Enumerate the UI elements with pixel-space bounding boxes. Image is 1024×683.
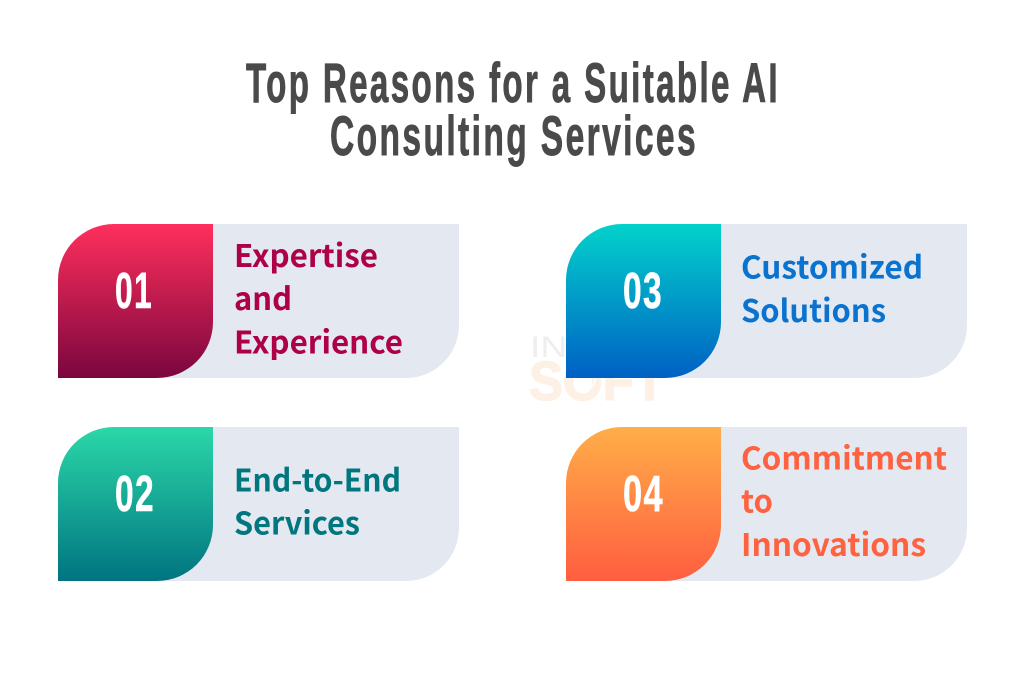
label 04: Innovations	[741, 520, 926, 565]
number 03: 03	[623, 262, 663, 319]
label 04: to	[741, 476, 773, 522]
panel: 02 End-to-End Services	[58, 427, 459, 581]
label 04: Commitment	[741, 434, 947, 478]
number tab 02	[58, 427, 213, 581]
label 01: Expertise	[234, 231, 378, 276]
watermark logo: SOFT	[529, 350, 665, 412]
number 02: 02	[115, 465, 155, 522]
label 03	[741, 242, 923, 331]
panel background 03	[628, 224, 967, 378]
panel: 01 Expertise and Experience	[58, 224, 459, 378]
number 04: 04	[623, 465, 664, 522]
title	[246, 51, 780, 167]
label 03: Solutions	[741, 286, 886, 331]
watermark logo: INT	[530, 331, 590, 364]
panel background 01	[120, 224, 459, 378]
title: Consulting Services	[330, 104, 698, 167]
panel: 03 Customized Solutions	[566, 224, 967, 378]
panel background 02	[120, 427, 459, 581]
label 01: Experience	[234, 318, 403, 362]
label 01: and	[234, 274, 292, 319]
number tab 03	[566, 224, 721, 378]
label 01	[234, 231, 403, 362]
panel: 04 Commitment to Innovations	[566, 427, 967, 581]
label 02: Services	[234, 498, 360, 544]
label 03: Customized	[741, 242, 923, 288]
panel background 04	[628, 427, 967, 581]
number 01: 01	[115, 262, 153, 319]
label 02: End-to-End	[234, 456, 401, 500]
label 04	[741, 434, 947, 565]
number tab 01	[58, 224, 213, 378]
number tab 04	[566, 427, 721, 581]
label 02	[234, 456, 401, 544]
